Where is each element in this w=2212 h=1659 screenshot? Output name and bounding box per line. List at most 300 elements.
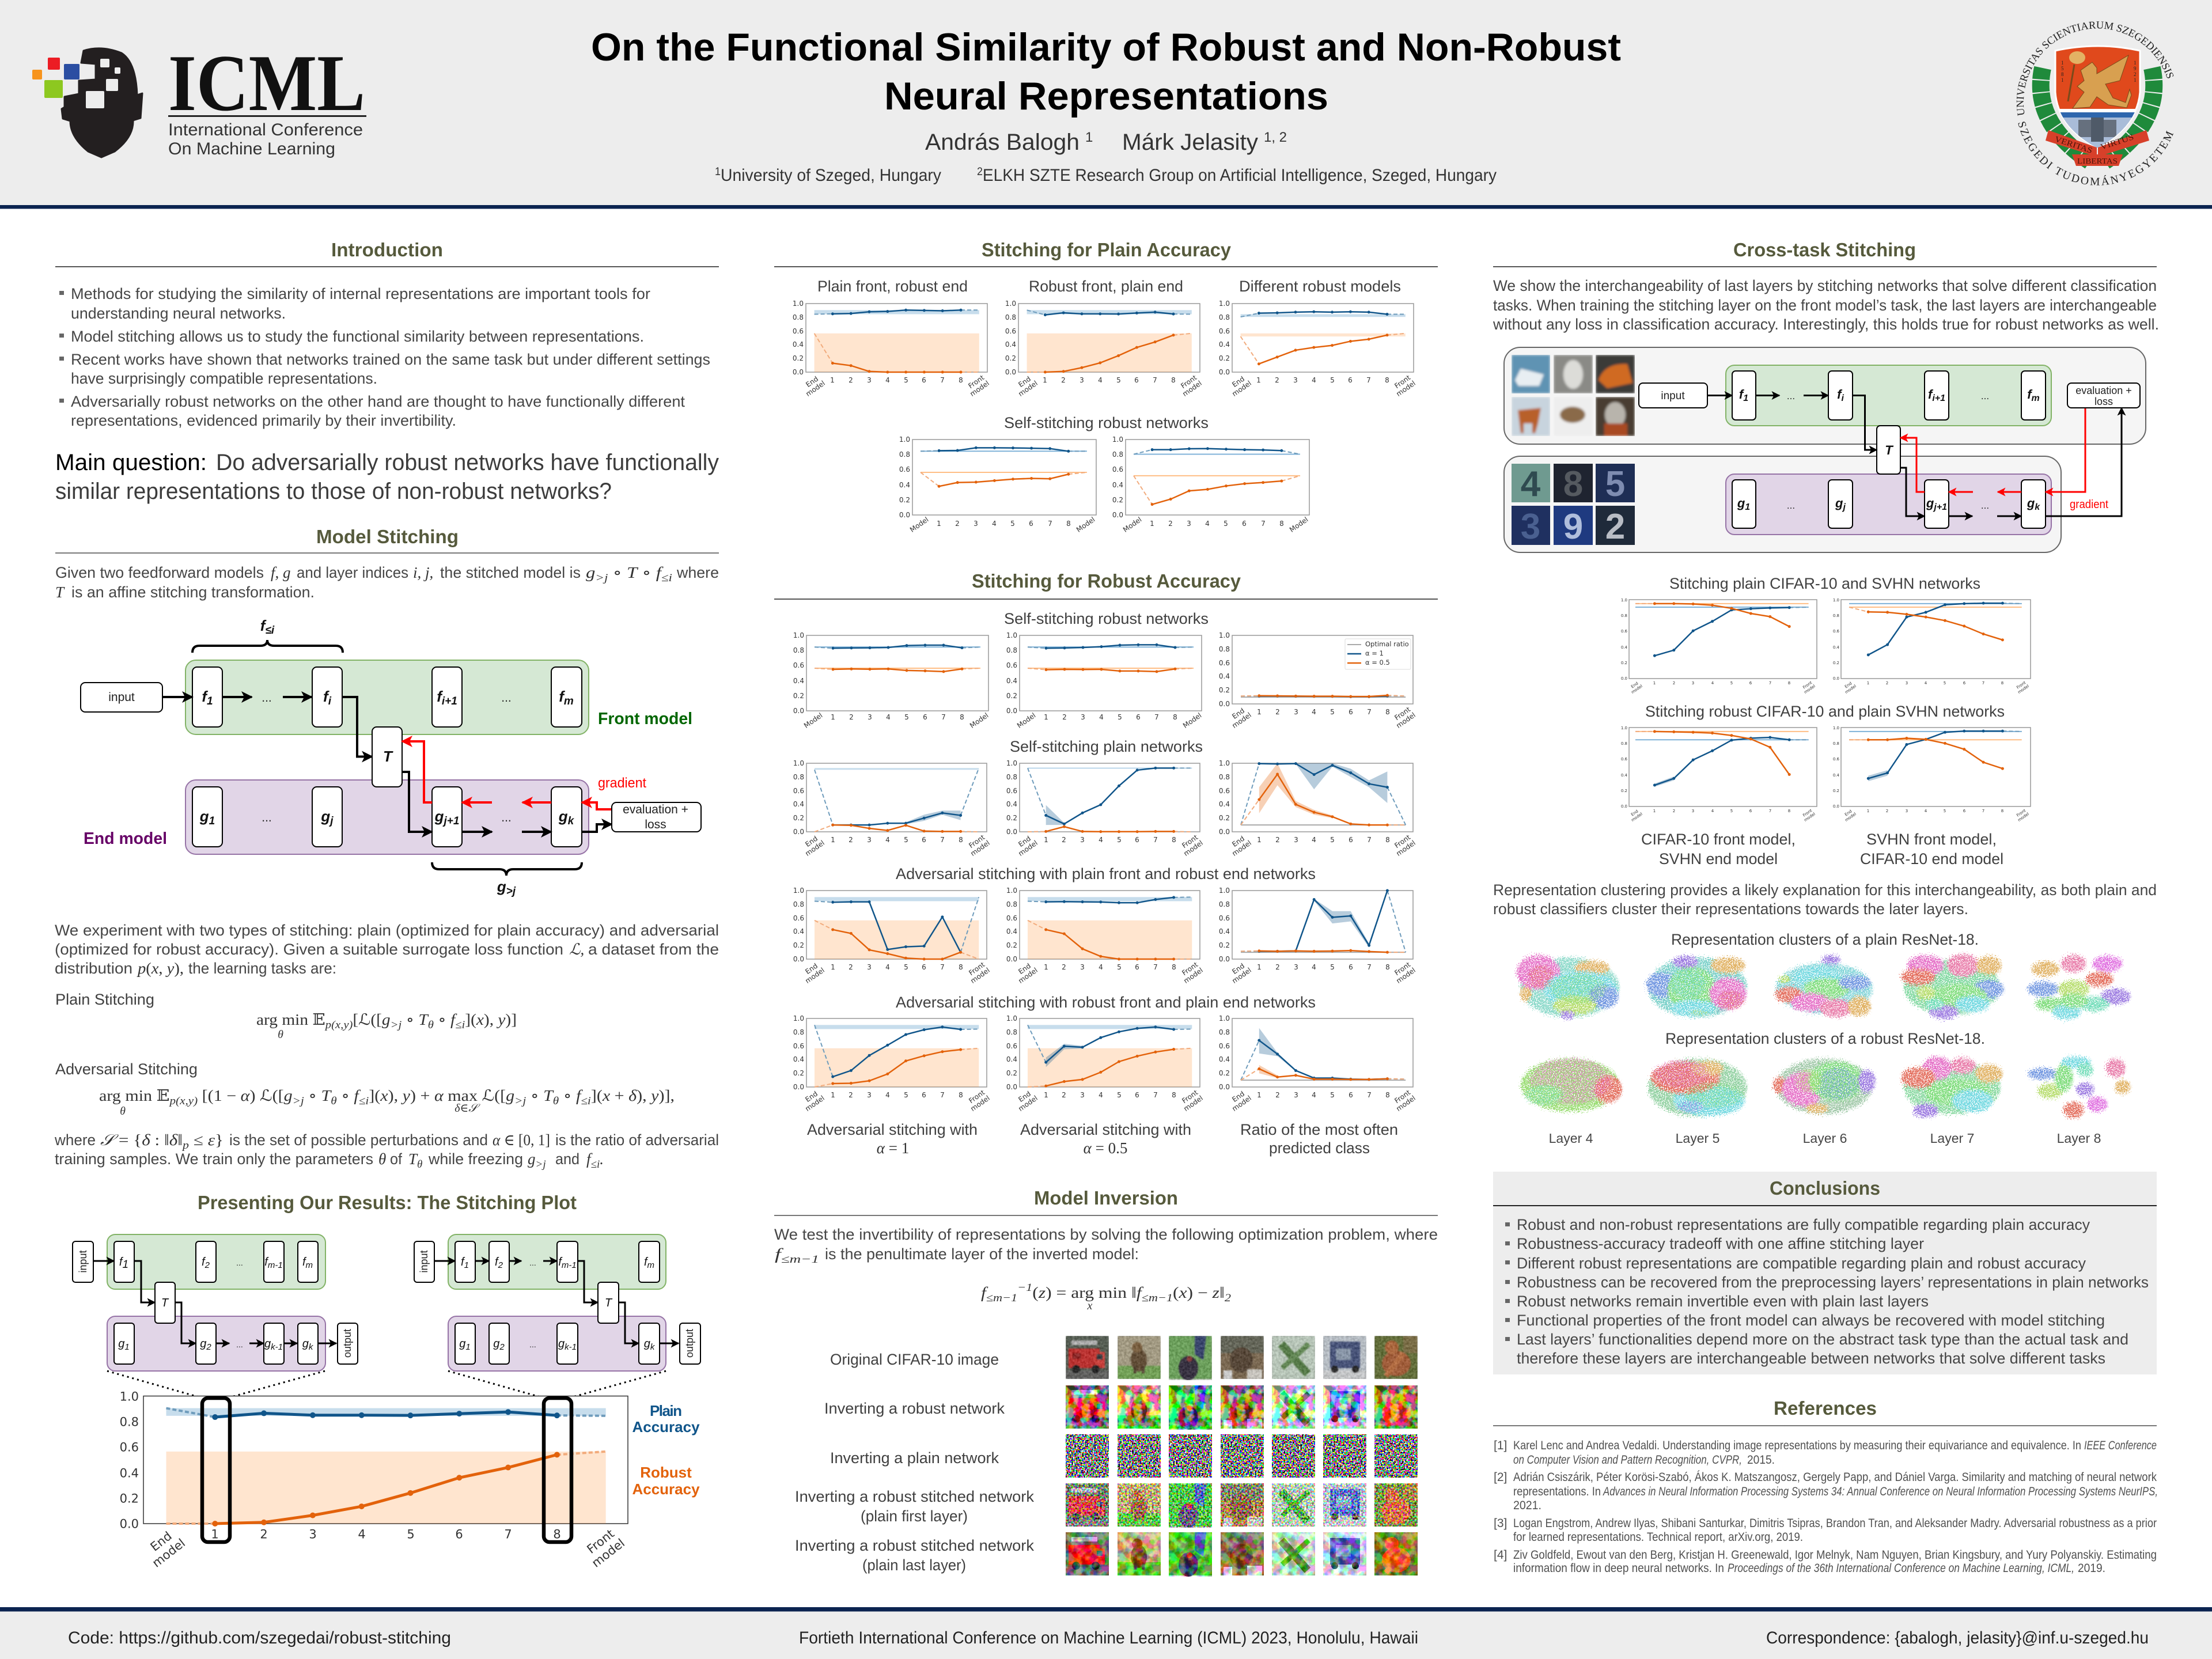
diagram: stitching at last layer: f	[558, 1256, 562, 1268]
heading: Stitching for Plain Accuracy: Stitching for Plain Accuracy	[982, 239, 1232, 260]
diagram: stitching at first layer: input	[77, 1250, 89, 1273]
chart: robust, SVHN front: model	[1844, 812, 1857, 823]
adversarial stitching equation: θ	[120, 1105, 126, 1118]
chart: self-stitching A	[899, 435, 1096, 534]
chart: row 3 alpha 1: 0.4	[793, 927, 804, 935]
affiliations: University of Szeged, Hungary	[721, 166, 941, 185]
caption: alpha 0.5: Adversarial stitching with	[1020, 1121, 1191, 1138]
inversion text: We test the invertibility of representations by solving the following optimization problem, where	[774, 1226, 1438, 1243]
model definition text: T ∘ f	[627, 564, 660, 581]
chart: robust, SVHN front: 0.2	[1833, 789, 1839, 793]
reference 1: IEEE Conference	[2084, 1439, 2157, 1452]
seal: University of Szeged: 1581	[2061, 60, 2064, 83]
layer labels: Layer 7	[1930, 1131, 1974, 1146]
chart: robust front plain end: Front	[1179, 373, 1198, 390]
model definition text: f, g	[271, 564, 291, 581]
diagram: stitching at last layer: T	[605, 1297, 613, 1309]
footer band	[0, 1607, 2212, 1659]
adversarial stitching equation: θ	[331, 1095, 337, 1107]
adversarial stitching equation: ∘	[304, 1087, 321, 1104]
diagram: stitching at last layer: f	[461, 1256, 464, 1268]
layer labels: Layer 8	[2057, 1131, 2101, 1146]
diagram: cross-task stitching: 8	[1563, 464, 1583, 504]
plain stitching equation	[55, 991, 517, 1041]
chart: row 3 alpha 1: 0.8	[793, 900, 804, 908]
chart: self-stitching A: 0.2	[899, 496, 910, 504]
seal: University of Szeged: LIBERTAS	[2077, 157, 2118, 166]
diagram: stitching at first layer: f	[264, 1256, 268, 1268]
diagram: stitching at first layer: g	[118, 1338, 124, 1350]
chart: robust, SVHN front: End	[1844, 809, 1853, 817]
chart: robust, SVHN front	[1833, 726, 2031, 823]
diagram: cross-task stitching: T	[1885, 443, 1893, 457]
legend: plain accuracy: Accuracy	[632, 1418, 700, 1435]
reference 4: information flow in deep neural networks. In	[1513, 1562, 1724, 1575]
diagram: cross-task stitching: k	[2035, 502, 2040, 512]
chart: row 3 alpha 0.5: model	[1182, 966, 1205, 985]
chart: robust, SVHN front: 1.0	[1833, 726, 1839, 730]
chart: row 2 ratio: 0.2	[1219, 814, 1230, 822]
chart: row 3 alpha 0.5: model	[1017, 966, 1039, 985]
chart: row 2 ratio	[1219, 759, 1417, 858]
chart: main stitching plot: 0.6	[120, 1440, 139, 1454]
chart: plain, SVHN front: model	[1844, 684, 1857, 695]
inversion equation: f	[981, 1284, 986, 1301]
seal: University of Szeged: 1921	[2134, 60, 2137, 83]
perturbation definition text	[54, 1131, 719, 1171]
chart: row 3 alpha 1: 0.0	[793, 955, 804, 963]
heading: Introduction: Introduction	[331, 239, 443, 260]
diagram: stitching at last layer: 2	[499, 1342, 505, 1352]
chart: robust, SVHN front: model	[2017, 812, 2030, 823]
chart: row 2 alpha 0.5: 1.0	[1006, 759, 1017, 767]
row label: robust stitched, plain last layer: Inverting a robust stitched network	[795, 1537, 1034, 1554]
logo: ICML: ICML	[168, 39, 365, 128]
diagram: stitching architecture: j+1	[442, 815, 459, 827]
diagram: stitching architecture: loss	[645, 818, 666, 831]
chart: row 2 alpha 0.5: 0.0	[1006, 828, 1017, 836]
caption: ratio	[1240, 1121, 1398, 1157]
chart: row 1 ratio with legend: 0.0	[1219, 700, 1230, 708]
diagram: cross-task stitching: ...	[1787, 500, 1795, 511]
main question: similar representations to those of non-robust networks?	[55, 479, 612, 504]
diagram: stitching architecture: m	[564, 695, 574, 707]
chart: robust, SVHN front: 0.6	[1833, 757, 1840, 762]
chart: row 2 alpha 1: 0.2	[793, 814, 804, 822]
caption: CIFAR-10 front: SVHN end model	[1659, 850, 1778, 868]
perturbation definition text: of	[390, 1150, 402, 1168]
chart: plain, CIFAR-10 front: End	[1630, 681, 1639, 689]
panel: Model Stitching	[54, 526, 719, 1171]
adversarial stitching equation: δ∈𝒮	[454, 1102, 480, 1115]
bullet list: Model stitching allows us to study the functional similarity between representations.	[71, 328, 644, 345]
diagram: stitching at first layer: 2	[204, 1260, 210, 1270]
chart: plain, CIFAR-10 front: 0.6	[1621, 629, 1628, 634]
perturbation definition text: .	[600, 1150, 604, 1168]
chart: row 3 alpha 1: model	[804, 966, 826, 985]
chart: row 3 alpha 1	[793, 887, 991, 985]
chart: plain, SVHN front: 1.0	[1833, 598, 1839, 603]
chart: main stitching plot: 0.4	[120, 1467, 139, 1480]
chart: row 1 alpha 0.5: 0.8	[1006, 646, 1017, 654]
chart: robust, CIFAR-10 front: model	[1803, 812, 1816, 823]
inversion equation: −1	[1017, 1282, 1032, 1294]
row label: original: Original CIFAR-10 image	[830, 1351, 999, 1368]
chart: row 1 alpha 1: 0.8	[793, 646, 804, 654]
diagram: cross-task stitching: f	[2027, 387, 2032, 402]
chart: row 2 ratio: Front	[1393, 833, 1412, 850]
stitching types text: (optimized for robust accuracy). Given a suitable surrogate loss function	[55, 941, 563, 958]
inversion equation: (	[1032, 1284, 1039, 1301]
perturbation definition text: f	[586, 1150, 591, 1168]
chart: row 1 ratio with legend: End	[1230, 706, 1246, 721]
chart: row 4 alpha 1: Front	[967, 1088, 986, 1105]
chart: robust front plain end: 0.6	[1005, 327, 1016, 335]
cross-task intro text	[1493, 277, 2159, 333]
chart: row 2 alpha 0.5: Front	[1180, 833, 1199, 850]
chart: plain, CIFAR-10 front: 0.2	[1621, 661, 1627, 665]
diagram: stitching at last layer: 1	[465, 1342, 471, 1352]
chart: self-stitching B: Model	[1288, 516, 1309, 534]
scatter: robust ResNet-18 layers	[1521, 1056, 2131, 1118]
chart: row 4 ratio: model	[1395, 1094, 1417, 1113]
inversion equation: x) − z‖	[1179, 1284, 1224, 1301]
reference 1: on Computer Vision and Pattern Recognition, CVPR,	[1513, 1453, 1742, 1467]
perturbation definition text: ε}	[208, 1131, 222, 1149]
adversarial stitching equation: x), y) + α max ℒ([ g	[380, 1087, 514, 1104]
diagram: stitching at last layer: k	[650, 1342, 656, 1352]
chart: robust, SVHN front: 0.4	[1833, 773, 1840, 778]
chart: plain, SVHN front: 0.4	[1833, 645, 1840, 650]
diagram: stitching at first layer: ...	[236, 1258, 243, 1267]
adversarial stitching equation: x + δ), y)],	[603, 1087, 673, 1104]
chart: row 1 ratio with legend: 0.8	[1219, 645, 1230, 653]
footer: correspondence: Correspondence: {abalogh, jelasity}@inf.u-szeged.hu	[1766, 1628, 2149, 1647]
chart: main stitching plot: 12345678	[211, 1528, 561, 1541]
subtitle: plain front robust end adversarial: Adversarial stitching with plain front and robust end networks	[896, 865, 1316, 882]
chart: robust front plain end	[1005, 300, 1203, 398]
caption: CIFAR-10 front: CIFAR-10 front model,	[1641, 831, 1796, 848]
cross-task intro text: We show the interchangeability of last layers by stitching networks that solve different classification	[1493, 277, 2157, 294]
header band	[0, 0, 2212, 209]
chart: row 2 ratio: 0.4	[1219, 800, 1230, 808]
chart: row 4 alpha 1: 0.0	[793, 1083, 804, 1091]
diagram: stitching at first layer: k-1	[271, 1342, 283, 1352]
chart: plain, SVHN front: 12345678	[1867, 681, 2003, 685]
chart: robust, CIFAR-10 front: Front	[1802, 808, 1813, 818]
chart: plain front robust end: 0.8	[793, 313, 804, 321]
diagram: cross-task stitching: input	[1661, 390, 1685, 402]
chart: row 4 alpha 0.5: 0.8	[1006, 1028, 1017, 1036]
diagram: stitching at last layer: k-1	[565, 1342, 577, 1352]
plain stitching equation: >j	[391, 1019, 402, 1031]
chart: row 4 ratio: 0.6	[1219, 1042, 1230, 1050]
chart: row 2 ratio: 0.8	[1219, 773, 1230, 781]
chart: row 3 ratio: 0.8	[1219, 900, 1230, 908]
perturbation definition text: training samples. We train only the parameters	[55, 1150, 373, 1168]
logo: ICML: On Machine Learning	[168, 139, 335, 158]
chart: plain front robust end: 0.4	[793, 340, 804, 349]
affiliations: ELKH SZTE Research Group on Artificial Intelligence, Szeged, Hungary	[983, 166, 1497, 185]
chart: row 4 alpha 0.5: Front	[1180, 1088, 1199, 1105]
chart: self-stitching A: Model	[908, 516, 930, 534]
subtitle: robust ResNet-18 clusters: Representation clusters of a robust ResNet-18.	[1665, 1030, 1985, 1047]
chart: self-stitching A: Model	[1075, 516, 1096, 534]
chart: self-stitching A: 0.4	[899, 481, 910, 489]
diagram: stitching at first layer: 1	[124, 1342, 130, 1352]
chart: row 2 alpha 0.5: 0.6	[1006, 787, 1017, 795]
chart: row 1 alpha 0.5: 0.0	[1006, 707, 1017, 715]
title	[591, 25, 1621, 118]
diagram: cross-task stitching: i+1	[1932, 393, 1945, 403]
authors: 1, 2	[1264, 130, 1287, 145]
perturbation definition text: >j	[536, 1158, 546, 1171]
chart: row 4 ratio: Front	[1393, 1088, 1412, 1105]
reference 1: [1]	[1494, 1439, 1507, 1452]
adversarial stitching equation: arg min 𝔼	[99, 1087, 169, 1104]
chart: plain front robust end: model	[968, 379, 991, 398]
chart: self-stitching B: 0.8	[1112, 450, 1123, 459]
affiliations	[715, 166, 1497, 185]
inversion text: ≤m−1	[781, 1253, 819, 1266]
reference 4: Proceedings of the 36th International Conference on Machine Learning, ICML,	[1728, 1562, 2074, 1575]
chart: row 2 alpha 0.5: End	[1017, 834, 1032, 849]
reference 1: Karel Lenc and Andrea Vedaldi. Understanding image representations by measuring their equivariance and equivalence. In	[1513, 1439, 2081, 1452]
reference 4: 2019.	[2078, 1562, 2105, 1575]
footer: conference: Fortieth International Conference on Machine Learning (ICML) 2023, Honolulu, Hawaii	[799, 1628, 1418, 1647]
diagram: stitching architecture: g	[497, 878, 506, 895]
row label: robust: Inverting a robust network	[824, 1400, 1005, 1417]
subtitle: plain CIFAR-10 and SVHN: Stitching plain CIFAR-10 and SVHN networks	[1669, 575, 1980, 592]
adversarial stitching equation: θ	[553, 1095, 559, 1107]
chart: robust, CIFAR-10 front: 12345678	[1653, 809, 1790, 813]
layer labels: Layer 5	[1676, 1131, 1719, 1146]
diagram: stitching at first layer: output	[342, 1329, 353, 1358]
plain stitching equation: arg min 𝔼	[256, 1011, 325, 1028]
chart: row 3 ratio: 0.6	[1219, 914, 1230, 922]
chart: plain, CIFAR-10 front: model	[1630, 684, 1643, 695]
reference 1	[1494, 1439, 2157, 1467]
diagram: cross-task stitching: gradient	[2070, 498, 2108, 511]
chart: row 1 alpha 0.5	[1006, 631, 1203, 730]
chart: row 3 alpha 0.5: 0.2	[1006, 941, 1017, 949]
seal: University of Szeged: SZEGEDI TUDOMÁNYEGYETEM	[2018, 122, 2174, 185]
title: On the Functional Similarity of Robust and Non-Robust	[591, 25, 1621, 69]
chart: self-stitching A: 0.8	[899, 450, 910, 459]
chart: robust, CIFAR-10 front: End	[1630, 809, 1639, 817]
conclusions list: Last layers’ functionalities depend more on the abstract task type than the actual task and	[1517, 1331, 2128, 1348]
cross-task intro text: tasks. When training the stitching layer on the front model’s task, the last layers are interchangeable	[1493, 297, 2157, 314]
diagram: cross-task stitching: 2	[1605, 507, 1625, 547]
caption: SVHN front: SVHN front model,	[1866, 831, 1997, 848]
chart: main stitching plot	[120, 1389, 628, 1570]
row label: robust stitched, plain last layer: (plain last layer)	[862, 1556, 966, 1574]
affiliations: 1	[715, 166, 721, 178]
chart: row 4 alpha 1: 0.8	[793, 1028, 804, 1036]
heading: Conclusions: Conclusions	[1770, 1177, 1880, 1199]
chart: row 3 alpha 1: Front	[967, 960, 986, 977]
diagram: stitching architecture: i+1	[442, 695, 457, 707]
affiliations: 2	[977, 166, 983, 178]
adversarial stitching equation: ∘	[559, 1087, 576, 1104]
chart: robust, CIFAR-10 front: 0.8	[1621, 741, 1627, 746]
subtitle: self-stitching robust networks: Self-stitching robust networks	[1004, 414, 1209, 431]
chart: robust, SVHN front: Front	[2016, 808, 2027, 818]
chart: row 3 ratio	[1219, 887, 1417, 985]
chart: plain, CIFAR-10 front: 0.4	[1621, 645, 1628, 650]
legend: robust accuracy: Robust	[640, 1464, 692, 1481]
panel: References	[1493, 1397, 2158, 1575]
plain stitching equation: f	[450, 1011, 455, 1028]
chart: robust front plain end: model	[1181, 379, 1203, 398]
chart: plain, SVHN front	[1833, 598, 2031, 695]
diagram: cross-task stitching: evaluation +	[2075, 385, 2132, 396]
chart: row 2 alpha 1: 12345678	[831, 836, 963, 844]
diagram: stitching at first layer: 1	[122, 1259, 128, 1271]
legend: robust accuracy: Accuracy	[632, 1480, 700, 1498]
diagram: stitching at last layer: input	[418, 1250, 430, 1273]
bullet list: understanding neural networks.	[71, 305, 286, 322]
diagram: cross-task stitching: m	[2032, 393, 2040, 403]
chart: main stitching plot: 0.0	[120, 1517, 139, 1531]
perturbation definition text: and	[555, 1150, 579, 1168]
inversion text	[774, 1226, 1438, 1266]
diagram: stitching architecture: ...	[501, 811, 512, 824]
diagram: cross-task stitching: g	[1835, 496, 1843, 510]
seal: University of Szeged: UNIVERSITAS SCIENTIARUM SZEGEDIENSIS	[2016, 21, 2174, 116]
adversarial stitching equation: ](	[369, 1087, 380, 1104]
diagram: stitching architecture: input	[108, 691, 135, 704]
chart: self-stitching B: 1.0	[1112, 435, 1123, 444]
chart: different robust models: 0.8	[1219, 313, 1230, 321]
perturbation definition text: p	[181, 1139, 189, 1152]
reference 3: for learned representations. Technical report, arXiv.org, 2019.	[1513, 1531, 1803, 1544]
chart: self-stitching B: 0.4	[1112, 481, 1123, 489]
adversarial stitching equation: T	[321, 1087, 330, 1104]
chart: row 3 alpha 0.5: 12345678	[1044, 963, 1176, 971]
chart: row 1 ratio with legend: 12345678	[1257, 708, 1390, 716]
panel: Stitching for Robust Accuracy	[774, 570, 1438, 1157]
adversarial stitching equation: α) ℒ([g	[241, 1087, 291, 1104]
diagram: stitching architecture: i	[328, 695, 332, 707]
chart: different robust models: 0.4	[1219, 340, 1230, 349]
diagram: stitching architecture: >j	[506, 885, 516, 897]
reference 2: [2]	[1494, 1471, 1507, 1484]
diagram: stitching at last layer: m-1	[562, 1260, 577, 1270]
chart: self-stitching A: 12345678	[937, 520, 1071, 528]
heading: References: References	[1774, 1397, 1877, 1419]
chart: plain, CIFAR-10 front: 0.0	[1621, 676, 1627, 681]
adversarial stitching equation: ≤i	[359, 1095, 369, 1107]
plain stitching equation: g	[382, 1011, 389, 1028]
reference 3: [3]	[1494, 1517, 1507, 1530]
diagram: stitching at first layer: T	[161, 1297, 169, 1309]
chart: row 3 ratio: model	[1230, 966, 1253, 985]
diagram: stitching architecture: g	[435, 808, 444, 825]
authors: András Balogh	[925, 130, 1080, 155]
subtitle: robust front, plain end: Robust front, plain end	[1029, 278, 1183, 295]
chart: row 4 alpha 0.5: model	[1017, 1094, 1039, 1113]
chart: different robust models: 0.2	[1219, 354, 1230, 362]
cross-task intro text: without any loss in classification accuracy. Interestingly, this holds true for robust networks as well.	[1493, 316, 2159, 333]
clustering text: Representation clustering provides a likely explanation for this interchangeability, as both plain and	[1493, 881, 2157, 899]
perturbation definition text: is the set of possible perturbations and	[229, 1131, 488, 1149]
adversarial stitching equation: [(1 −	[198, 1087, 241, 1104]
reference 2: representations. In	[1513, 1485, 1601, 1498]
seal: University of Szeged: VIRTUS	[2100, 133, 2135, 152]
inversion equation: x	[1087, 1300, 1093, 1312]
chart: row 2 ratio: End	[1230, 834, 1246, 849]
diagram: cross-task stitching: loss	[2094, 396, 2113, 407]
chart: robust front plain end: model	[1017, 379, 1039, 398]
diagram: stitching architecture: f	[437, 688, 442, 705]
chart: row 1 ratio with legend: 1.0	[1219, 631, 1230, 639]
adversarial stitching equation: ](	[591, 1087, 603, 1104]
chart: row 2 alpha 1	[793, 759, 991, 858]
chart: row 3 alpha 1: model	[969, 966, 991, 985]
chart: row 2 ratio: model	[1395, 839, 1417, 858]
chart: main stitching plot: model	[589, 1536, 627, 1570]
chart: main stitching plot: 0.2	[120, 1492, 139, 1506]
chart: row 3 alpha 0.5: 0.4	[1006, 927, 1017, 935]
main question	[55, 450, 719, 504]
inversion text: is the penultimate layer of the inverted model:	[825, 1245, 1139, 1263]
main question: Main question:	[55, 450, 207, 475]
stitching types text	[55, 922, 719, 977]
adversarial stitching equation: >j	[514, 1095, 526, 1107]
adversarial stitching equation: >j	[293, 1095, 304, 1107]
model definition text: where	[676, 564, 719, 581]
diagram: stitching at first layer: f	[202, 1256, 205, 1268]
chart: self-stitching A: 0.6	[899, 465, 910, 474]
seal: University of Szeged	[2016, 21, 2174, 185]
chart: row 3 alpha 1: End	[804, 961, 819, 976]
diagram: stitching at last layer: m	[647, 1260, 654, 1270]
chart: self-stitching B: 0.6	[1112, 465, 1123, 474]
clustering text: robust classifiers cluster their representations towards the later layers.	[1493, 900, 1968, 918]
model definition text	[55, 564, 719, 601]
chart: robust front plain end: 1.0	[1005, 300, 1016, 308]
chart: main stitching plot: Front	[584, 1527, 617, 1556]
chart: different robust models: 1.0	[1219, 300, 1230, 308]
chart: row 1 ratio with legend	[1219, 631, 1417, 730]
diagram: stitching architecture: 1	[209, 815, 215, 827]
chart: plain front robust end: 0.6	[793, 327, 804, 335]
chart: main stitching plot: End	[148, 1529, 175, 1554]
chart: self-stitching B: 0.0	[1112, 511, 1123, 519]
chart: row 2 alpha 0.5	[1006, 759, 1205, 858]
chart: plain, SVHN front: 0.0	[1833, 676, 1839, 681]
diagram: stitching at last layer: 2	[498, 1260, 503, 1270]
chart: row 4 alpha 1: 0.2	[793, 1069, 804, 1077]
subtitle: plain front, robust end: Plain front, robust end	[817, 278, 968, 295]
chart: row 4 alpha 1	[793, 1014, 991, 1113]
caption: alpha 0.5: α = 0.5	[1084, 1139, 1127, 1157]
chart: row 2 ratio: model	[1230, 839, 1253, 858]
adversarial stitching equation: f	[354, 1087, 358, 1104]
panel: Stitching for Plain Accuracy	[774, 239, 1438, 534]
chart: plain, SVHN front: 0.6	[1833, 629, 1840, 634]
adversarial stitching equation: ∘	[337, 1087, 354, 1104]
diagram: stitching architecture: f	[323, 688, 328, 705]
chart: row 1 ratio with legend: Optimal ratio	[1365, 640, 1409, 648]
chart: row 4 alpha 1: 0.6	[793, 1042, 804, 1050]
chart: plain, SVHN front: End	[1844, 681, 1853, 689]
chart: row 2 alpha 0.5: 0.4	[1006, 800, 1017, 808]
diagram: stitching architecture: T	[383, 748, 393, 765]
diagram: stitching at last layer: ...	[529, 1258, 536, 1267]
perturbation definition text: θ	[378, 1150, 386, 1168]
